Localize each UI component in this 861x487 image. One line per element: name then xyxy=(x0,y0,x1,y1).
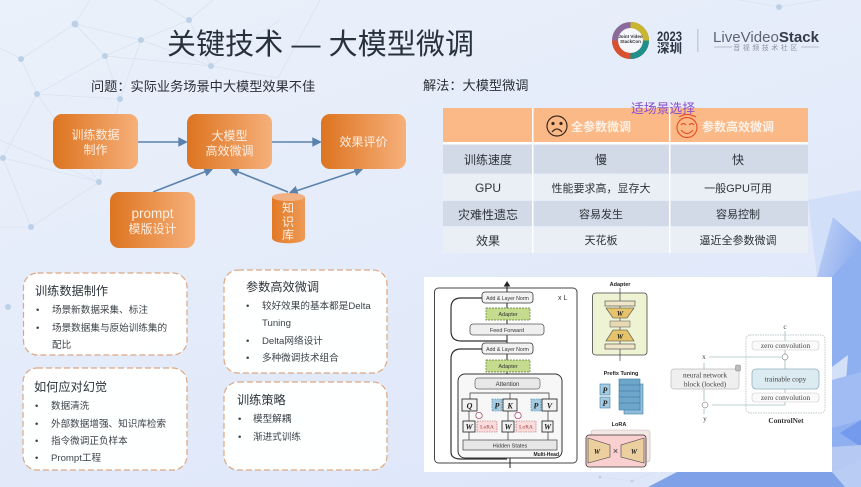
diagram: adapter: W xyxy=(617,333,624,341)
panel: training data preparation: • xyxy=(36,305,39,316)
diagram: transformer block: Feed Forward xyxy=(490,328,524,334)
panel: training data preparation: 训练数据制作 xyxy=(35,283,108,298)
cylinder: knowledge base: 知 xyxy=(282,201,294,215)
diagram: adapter xyxy=(592,282,647,361)
diagram: transformer block: Hidden States xyxy=(493,444,528,450)
cylinder: knowledge base xyxy=(272,193,305,243)
table row: effect: 效果 xyxy=(476,233,500,248)
table header: 参数高效微调 xyxy=(702,119,774,134)
box: training data xyxy=(53,114,138,169)
logo: LiveVideoStack: 音视频技术社区 xyxy=(733,43,800,52)
logo: 2023 Shenzhen: 深圳 xyxy=(657,40,682,56)
cylinder: knowledge base: 库 xyxy=(282,227,294,242)
heading: problem: 问题：实际业务场景中大模型效果不佳 xyxy=(91,79,315,94)
table row: catastrophic forgetting: 容易发生 xyxy=(579,207,623,221)
box: training data: 制作 xyxy=(83,143,108,157)
table header: 全参数微调 xyxy=(571,119,631,134)
table row: catastrophic forgetting xyxy=(443,201,808,226)
diagram: transformer block: LoRA xyxy=(480,424,494,430)
diagram: ControlNet: y xyxy=(703,414,707,423)
diagram: ControlNet: block (locked) xyxy=(684,380,727,388)
logo: 2023 Shenzhen xyxy=(657,28,682,56)
logo: LiveVideoStack: LiveVideoStack xyxy=(713,29,820,46)
diagram: transformer block: Multi-Head xyxy=(533,452,559,458)
panel: efficient parameter tuning: Delta网络设计 xyxy=(262,335,323,347)
logo: conference ring: StackCon xyxy=(620,39,641,44)
diagram: ControlNet xyxy=(671,322,825,425)
panel: handling hallucination: • xyxy=(35,419,38,430)
diagram: transformer block: K xyxy=(506,402,513,410)
table row: training speed: 快 xyxy=(732,153,744,167)
heading: solution: 解法：大模型微调 xyxy=(423,78,528,93)
table row: effect: 逼近全参数微调 xyxy=(700,233,776,247)
diagram: transformer block: W xyxy=(504,422,512,432)
diagram: transformer block: P xyxy=(495,402,500,410)
panel: handling hallucination: 外部数据增强、知识库检索 xyxy=(51,418,166,430)
diagram: ControlNet: zero convolution xyxy=(761,393,810,402)
diagram: transformer block: Adapter xyxy=(498,364,518,370)
diagram: transformer block: Q xyxy=(467,402,473,410)
panel: training data preparation: 配比 xyxy=(52,339,72,351)
panel: efficient parameter tuning: • xyxy=(246,353,249,364)
diagram: transformer block: W xyxy=(465,422,473,432)
panel: training strategy xyxy=(224,382,387,470)
icon: happy face xyxy=(677,114,697,138)
panel: handling hallucination: • xyxy=(35,453,38,464)
panel: handling hallucination: • xyxy=(35,436,38,447)
table row: GPU: 一般GPU可用 xyxy=(704,182,772,195)
panel: training data preparation: 场景数据集与原始训练集的 xyxy=(52,322,167,334)
diagram: prefix tuning: Prefix Tuning xyxy=(604,371,638,377)
panel: handling hallucination: 如何应对幻觉 xyxy=(34,379,107,394)
diagram: prefix tuning: P xyxy=(603,399,608,408)
diagram: transformer block: x L xyxy=(558,295,567,302)
box: prompt template: 模版设计 xyxy=(128,222,177,236)
table row: training speed: 慢 xyxy=(595,153,607,167)
panel: handling hallucination: 指令微调正负样本 xyxy=(51,435,128,447)
panel: efficient parameter tuning: Tuning xyxy=(262,318,291,329)
panel: training strategy: • xyxy=(238,414,241,425)
box: training data: 训练数据 xyxy=(71,127,120,142)
table row: GPU xyxy=(443,174,808,200)
panel: training strategy: • xyxy=(238,432,241,443)
panel: training data preparation: 场景新数据采集、标注 xyxy=(52,304,148,316)
cylinder: knowledge base: 识 xyxy=(282,215,294,229)
icon: sad face xyxy=(547,116,567,136)
diagram: LoRA: W xyxy=(631,448,638,456)
box: fine-tuning: 高效微调 xyxy=(205,143,254,158)
table row: GPU: 性能要求高，显存大 xyxy=(552,181,650,195)
box: evaluation xyxy=(321,114,406,169)
diagram: transformer block: Adapter xyxy=(498,312,518,318)
diagram: LoRA xyxy=(586,422,650,467)
logo: conference ring xyxy=(615,25,646,56)
box: fine-tuning xyxy=(187,114,272,169)
panel: handling hallucination: 数据清洗 xyxy=(51,400,90,412)
annotation: choose by scenario: 适场景选择 xyxy=(631,101,695,116)
diagram: adapter: W xyxy=(617,310,624,318)
diagram: LoRA: × xyxy=(613,446,618,456)
panel: efficient parameter tuning: • xyxy=(246,336,249,347)
diagram: transformer block: V xyxy=(547,402,553,410)
diagram: ControlNet: zero convolution xyxy=(761,341,810,350)
title: 关键技术 — 大模型微调 xyxy=(167,28,474,61)
diagram: transformer block: W xyxy=(544,422,552,432)
diagram: transformer block: Add & Layer Norm xyxy=(486,296,529,302)
panel: training data preparation xyxy=(24,273,187,355)
logo: 2023 Shenzhen: 2023 xyxy=(657,28,682,44)
figure panel: model architectures xyxy=(424,277,832,472)
diagram: prefix tuning xyxy=(600,371,643,414)
diagram: prefix tuning: P xyxy=(603,386,608,395)
table row: training speed xyxy=(443,144,808,174)
box: prompt template: prompt xyxy=(131,206,174,221)
diagram: ControlNet: ControlNet xyxy=(768,416,804,425)
flow arrows xyxy=(138,142,362,193)
panel: handling hallucination xyxy=(23,368,187,470)
table row: effect xyxy=(443,227,808,253)
panel: handling hallucination: • xyxy=(35,401,38,412)
table row: catastrophic forgetting: 灾难性遗忘 xyxy=(458,207,518,222)
diagram: transformer block: P xyxy=(534,402,539,410)
panel: training data preparation: • xyxy=(36,323,39,334)
icon: lock xyxy=(736,365,740,371)
panel: efficient parameter tuning: 多种微调技术组合 xyxy=(262,352,339,364)
diagram: transformer block: Add & Layer Norm xyxy=(486,347,529,353)
flow diagram xyxy=(53,114,406,248)
diagram: adapter: Adapter xyxy=(610,282,631,288)
table row: training speed: 训练速度 xyxy=(464,152,512,167)
table row: effect: 天花板 xyxy=(584,233,618,247)
panel: handling hallucination: Prompt工程 xyxy=(51,453,102,464)
panel: training strategy: 模型解耦 xyxy=(253,413,292,425)
table row: GPU: GPU xyxy=(475,181,501,195)
diagram: ControlNet: c xyxy=(783,322,787,331)
panel: efficient parameter tuning xyxy=(224,270,387,373)
box: fine-tuning: 大模型 xyxy=(211,129,248,143)
diagram: ControlNet: x xyxy=(702,352,706,361)
diagram: transformer block: Attention xyxy=(496,382,519,388)
panel: efficient parameter tuning: 参数高效微调 xyxy=(246,279,319,294)
panel: training strategy: 渐进式训练 xyxy=(253,431,301,443)
comparison table xyxy=(443,108,808,253)
box: evaluation: 效果评价 xyxy=(339,134,388,149)
diagram: transformer block: LoRA xyxy=(519,424,533,430)
diagram: ControlNet: neural network xyxy=(683,370,727,380)
panel: efficient parameter tuning: 较好效果的基本都是Delta xyxy=(262,300,371,312)
diagram: LoRA: W xyxy=(594,448,601,456)
diagram: LoRA: LoRA xyxy=(612,422,626,428)
diagram: transformer block xyxy=(434,282,577,468)
panel: efficient parameter tuning: • xyxy=(246,301,249,312)
table header xyxy=(443,108,808,142)
table row: catastrophic forgetting: 容易控制 xyxy=(716,207,760,221)
logo: conference ring: Joint Video xyxy=(618,34,643,39)
diagram: ControlNet: trainable copy xyxy=(765,374,807,384)
background: blue polygons bottom right xyxy=(648,190,861,487)
box: prompt template xyxy=(110,192,195,248)
panel: training strategy: 训练策略 xyxy=(237,392,286,407)
